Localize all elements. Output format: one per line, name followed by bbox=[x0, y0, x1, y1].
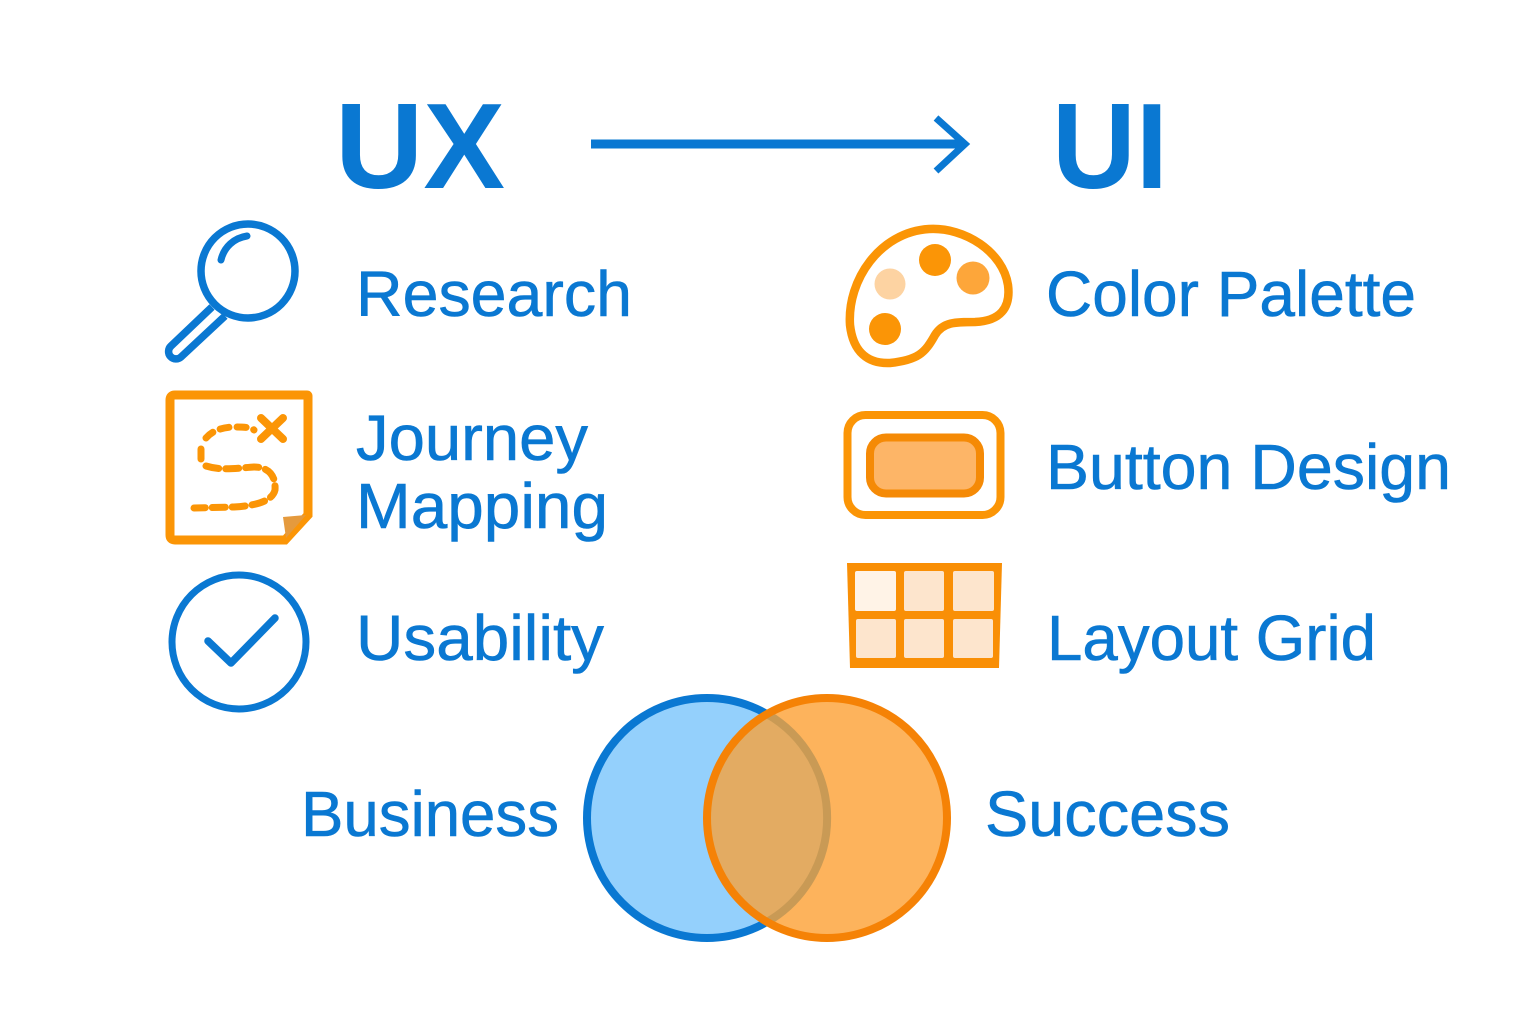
label: Color Palette: Color Palette bbox=[1046, 258, 1416, 330]
venn diagram bbox=[587, 698, 947, 938]
label: Research: Research bbox=[356, 258, 632, 330]
icon: journey map bbox=[170, 395, 308, 540]
label: Journey Mapping: Mapping bbox=[356, 470, 608, 542]
icon: check circle bbox=[172, 575, 306, 709]
label: Journey Mapping bbox=[356, 402, 608, 542]
label: Business: Business bbox=[301, 778, 559, 850]
label: Success: Success bbox=[985, 778, 1230, 850]
icon: color palette bbox=[850, 229, 1008, 363]
icon: magnifying glass bbox=[169, 224, 295, 359]
label: Journey Mapping: Journey bbox=[356, 402, 588, 474]
icon: button design bbox=[848, 415, 1000, 515]
arrow: UX to UI bbox=[591, 118, 965, 171]
heading: UX: UX bbox=[335, 78, 505, 214]
icon: layout grid bbox=[847, 563, 1002, 668]
label: Usability: Usability bbox=[356, 602, 604, 674]
heading: UI: UI bbox=[1052, 78, 1168, 214]
label: Button Design: Button Design bbox=[1046, 431, 1451, 503]
label: Layout Grid: Layout Grid bbox=[1047, 602, 1376, 674]
